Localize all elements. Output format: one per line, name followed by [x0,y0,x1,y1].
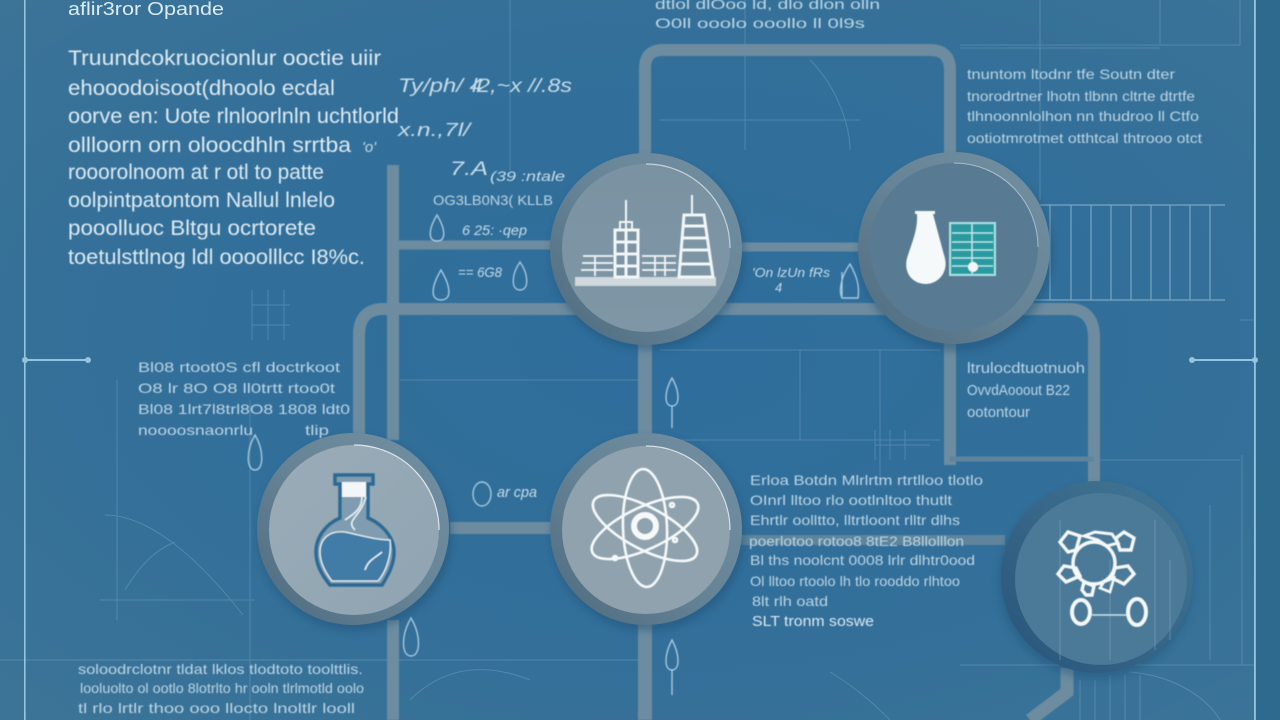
node: flask and chart [858,152,1053,351]
icon: refinery towers [575,195,716,286]
bottom left text: looluolto ol ootlo 8lotrlto hr ooln tlrlmotld oolo [80,680,364,696]
centre right text: Erloa Botdn Mlrlrtm rtrtlloo tlotlo [750,472,983,488]
left middle text: Bl08 rtoot0S cfl doctrkoot [138,359,340,375]
top centre text: O0ll ooolo ooollo ll 0l9s [655,15,865,31]
formula sketch: 'On lzUn fRs [752,265,831,280]
centre right text [749,472,983,630]
node: round flask [257,433,452,631]
centre right text: OInrl lltoo rlo ootlnltoo thutlt [750,492,952,508]
top centre text [655,0,880,31]
blueprint chart [1035,205,1225,300]
right middle text: OvvdAooout B22 [967,382,1070,399]
formula sketch: Ty/ph/ 4 [398,76,483,97]
formula sketch: x.n.,7l/ [397,120,473,140]
centre right text: Bl ths noolcnt 0008 lrlr dlhtr0ood [750,552,975,568]
formula sketch: ar cpa [497,484,537,501]
formula sketch [362,76,831,501]
icon: gear molecule [1058,532,1146,625]
top right text: tnorodrtner lhotn tlbnn cltrte dtrtfe [967,88,1195,104]
left middle text: noooosnaonrlu [138,422,253,438]
node: molecule [999,481,1193,679]
main text block: pooolluoc Bltgu ocrtorete [68,217,316,240]
left middle text: Bl08 1lrt7l8trl8O8 1808 ldt0 [138,401,350,417]
connector pipes [359,50,1094,720]
main text block: ollloorn orn oloocdhln srrtba [68,134,351,157]
icons: droplet sketches [248,215,859,695]
centre right text: 8lt rlh oatd [752,593,828,609]
formula sketch: 6 25: ·qep [462,222,527,238]
right middle text: ootontour [967,404,1030,421]
right middle text: ltrulocdtuotnuoh [967,360,1085,377]
icon: round-bottom flask [316,475,394,585]
icon: data panel [950,223,995,275]
formula sketch: 4 [775,280,782,295]
node: plant towers [550,153,745,350]
main text block [68,47,399,269]
main text block: oolpintpatontom Nallul lnlelo [68,189,335,212]
main text block: Truundcokruocionlur ooctie uiir [68,47,381,70]
formula sketch: == 6G8 [458,264,502,280]
formula sketch: 7.A [450,159,488,180]
node: atom [550,433,745,631]
main text block: toetulsttlnog ldl oooolllcc I8%c. [68,246,365,269]
formula sketch: l2,~x //.8s [472,76,573,97]
left middle text [138,359,350,438]
left middle text: tlip [305,422,329,438]
bottom left text [78,661,364,716]
centre right text: Ehrtlr oolltto, lltrtloont rlltr dlhs [750,512,960,528]
formula sketch: OG3LB0N3( KLLB [433,192,553,208]
icon: atom [584,468,706,588]
centre right text: SLT tronm soswe [752,613,874,630]
top right text: ootiotmrotmet otthtcal thtrooo otct [967,130,1202,146]
centre right text: poerlotoo rotoo8 8tE2 B8llolllon [749,533,964,549]
main text block: oorve en: Uote rlnloorlnln uchtlorld [68,105,399,128]
bottom left text: soloodrclotnr tldat lklos tlodtoto toolttlis. [78,661,363,677]
top right text [967,66,1202,146]
right middle text [967,360,1085,421]
formula sketch: (39 :ntale [490,168,565,184]
formula sketch: 'o' [362,139,377,156]
top right text: tnuntom ltodnr tfe Soutn dter [967,66,1175,82]
main text block: ehooodoisoot(dhoolo ecdal [68,77,335,100]
main text block: rooorolnoom at r otl to patte [68,161,324,184]
centre right text: Ol lltoo rtoolo lh tlo rooddo rlhtoo [750,573,960,589]
right edge band [1256,0,1280,720]
left middle text: O8 lr 8O O8 ll0trtt rtoo0t [138,380,335,396]
bottom left text: tl rlo lrtlr thoo ooo llocto lnoltlr looll [78,700,355,716]
top right text: tlhnoonnlolhon nn thudroo ll Ctfo [967,108,1199,124]
icon: white flask [906,211,946,284]
